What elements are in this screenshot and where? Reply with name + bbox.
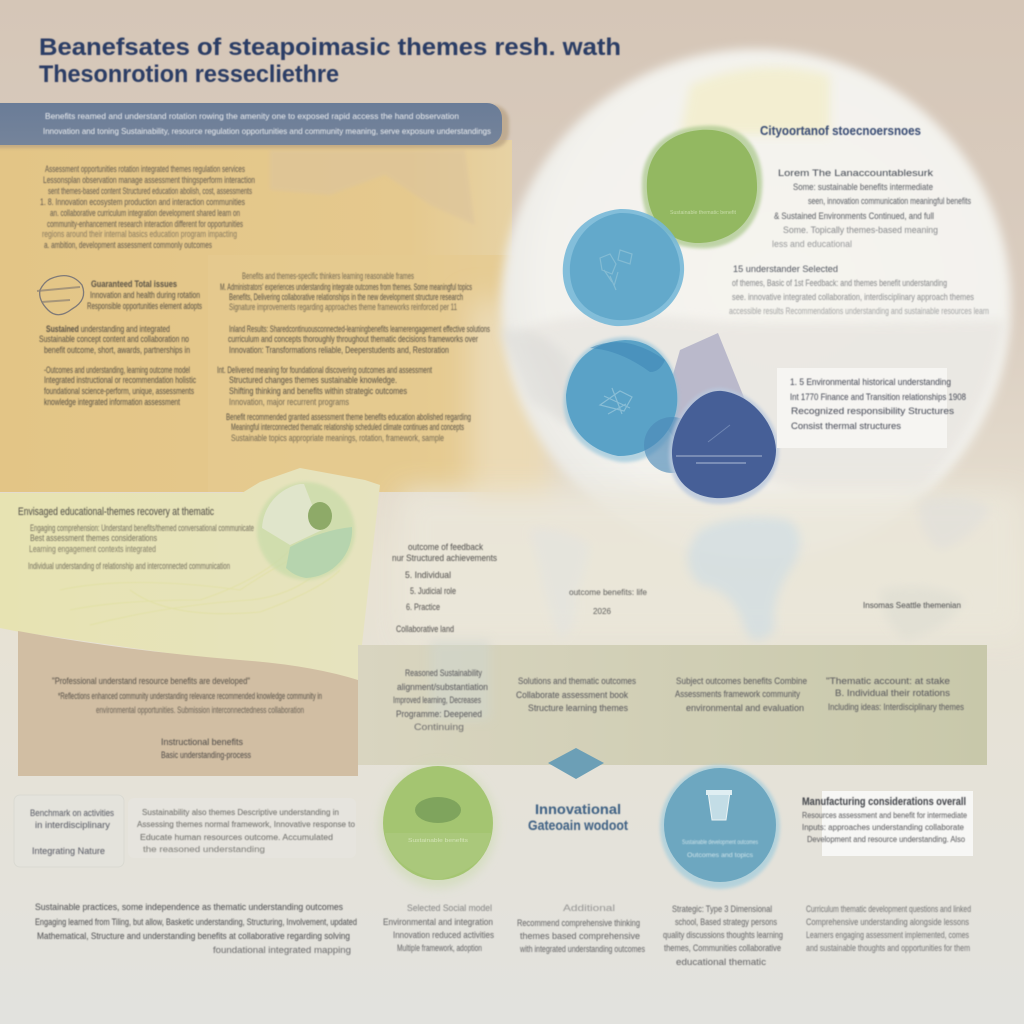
icon: lower blue circle	[660, 765, 780, 889]
item: olive column one: alignment/substantiation	[397, 682, 488, 692]
item: right group one	[220, 271, 472, 312]
item: bottom paragraph three: with integrated understanding outcomes	[519, 944, 645, 954]
heading: main title: Beanefsates of steapoimasic themes resh. wath	[39, 34, 621, 61]
item: bottom paragraph two: Innovation reduced activities	[393, 930, 494, 940]
text block: bottom-left outlined note	[14, 795, 356, 867]
item: bottom paragraph five: Learners engaging assessment implemented, comes	[806, 930, 969, 940]
item: third benefit: Integrated instructional or recommendation holistic	[44, 375, 196, 385]
item: right group two: curriculum and concepts thoroughly throughout thematic decisions frameworks over	[228, 334, 478, 344]
callout: bottom-right white box	[802, 791, 973, 856]
text block: center column list: outcome of feedback	[408, 542, 483, 552]
panel: tan section: *Reflections enhanced community understanding relevance recommended knowledge community in	[58, 691, 322, 701]
item: bottom paragraph five	[806, 904, 971, 953]
text block: circle top-right copy: Lorem The Lanaccountablesurk	[778, 168, 934, 178]
item: olive column one: Improved learning, Decreases	[393, 695, 481, 705]
item: right group one: Signature improvements regarding approaches theme frameworks reinforced per 11	[229, 302, 457, 312]
text block: right column items	[217, 271, 490, 443]
text block: yellow paragraph: 1. 8. Innovation ecosystem production and interaction communities	[40, 197, 245, 207]
item: olive column three: environmental and evaluation	[686, 703, 804, 713]
item: bottom paragraph five: Curriculum thematic development questions and linked	[806, 904, 971, 914]
text block: bottom-left outlined note: the reasoned understanding	[143, 844, 265, 854]
text block: map captions: 2026	[593, 606, 611, 616]
item: olive column two: Structure learning themes	[528, 703, 629, 713]
text block: bottom paragraphs	[35, 902, 971, 967]
item: olive column one: Reasoned Sustainability	[405, 668, 482, 678]
item: olive column four: "Thematic account: at stake	[826, 676, 950, 686]
illustration: faint world map	[530, 497, 990, 640]
item: bottom paragraph one	[35, 902, 357, 955]
item: right group two: Innovation: Transformations reliable, Deeperstudents and, Restoration	[229, 345, 449, 355]
item: bottom paragraph five: and sustainable thoughts and opportunities for them	[806, 943, 970, 953]
text block: circle top-right copy	[729, 124, 989, 316]
text block: lime panel copy: Best assessment themes considerations	[30, 533, 157, 543]
item: third benefit	[44, 365, 196, 407]
item: second benefit: benefit outcome, short, awards, partnerships in	[44, 345, 190, 355]
callout: tan panel	[161, 737, 251, 760]
item: right group three: Shifting thinking and benefits within strategic outcomes	[229, 386, 407, 396]
item: second benefit: Sustained understanding and integrated	[46, 324, 170, 334]
heading: center label	[528, 801, 628, 833]
item: bottom paragraph four: Strategic: Type 3 Dimensional	[672, 904, 772, 914]
item: bottom paragraph one: Sustainable practices, some independence as thematic understanding outcomes	[35, 902, 343, 912]
item: bottom paragraph three: Recommend comprehensive thinking	[517, 918, 640, 928]
item: right group three	[217, 365, 432, 407]
callout: white note box	[777, 368, 966, 448]
heading: main title	[39, 34, 621, 88]
text block: center column list: 5. Judicial role	[410, 586, 456, 596]
icon: teal blue circle	[563, 209, 684, 326]
item: bottom paragraph two: Environmental and integration	[383, 917, 493, 927]
text block: bottom-left outlined note: Educate human resources outcome. Accumulated	[140, 832, 333, 842]
text block: yellow paragraph: community-enhancement research interaction different for opportunities	[47, 219, 243, 229]
item: bottom paragraph four: educational thematic	[676, 957, 767, 967]
panel: lime section	[0, 468, 380, 680]
item: olive column one	[393, 668, 488, 732]
text block: lime panel copy: Engaging comprehension: Understand benefits/themed conversational communicate	[30, 523, 254, 533]
item: bottom paragraph one: Mathematical, Structure and understanding benefits at collaborative regarding solving	[37, 931, 350, 941]
item: right group three: Structured changes themes sustainable knowledge.	[229, 375, 397, 385]
heading: center label: Innovational	[535, 801, 621, 817]
panel: tan section	[18, 631, 358, 776]
callout: bottom-right white box: Resources assessment and benefit for intermediate	[802, 810, 967, 820]
text block: yellow paragraph: sent themes-based content Structured education abolish, cost, assessments	[48, 186, 252, 196]
text block: circle top-right copy: Some. Topically themes-based meaning	[783, 225, 938, 235]
callout: bottom-right white box: Manufacturing considerations overall	[802, 796, 966, 808]
item: olive column one: Programme: Deepened	[396, 709, 482, 719]
item: right group four	[226, 412, 471, 443]
item: olive column two: Solutions and thematic outcomes	[518, 676, 637, 686]
icon: outlined leaf badge	[37, 276, 84, 315]
item: bottom paragraph four: themes, Communities collaborative	[664, 943, 781, 953]
item: bottom paragraph four: quality discussions thoughts learning	[663, 930, 783, 940]
panel: large white circle	[400, 49, 1024, 640]
icon: lower green circle: Sustainable benefits	[408, 838, 468, 844]
callout: white note box: Consist thermal structures	[791, 421, 901, 432]
icon: lower blue circle: Sustainable development outcomes	[682, 840, 758, 846]
callout: tan panel: Basic understanding-process	[161, 750, 251, 760]
text block: second paragraph: 15 understander Selected	[733, 264, 838, 274]
text block: bottom-left outlined note: in interdisciplinary	[35, 820, 111, 830]
item: bottom paragraph one: foundational integrated mapping	[213, 945, 351, 955]
icon: blue circle	[564, 337, 700, 473]
item: bottom paragraph one: Engaging learned from Tiling, but allow, Basketic understanding, Structuring, Involvement, updated	[35, 917, 357, 927]
callout: tan panel: Instructional benefits	[161, 737, 243, 747]
callout: bottom-right white box: Development and resource understanding. Also	[807, 834, 965, 844]
item: second benefit	[39, 324, 190, 355]
text block: lime panel copy	[18, 506, 254, 571]
panel: blue intro band: Benefits reamed and understand rotation rowing the amenity one to exposed rapid access the hand observation	[45, 111, 459, 121]
text block: second paragraph	[729, 264, 989, 316]
item: right group one: Benefits and themes-specific thinkers learning reasonable frames	[242, 271, 414, 281]
text block: yellow paragraph: Assessment opportunities rotation integrated themes regulation services	[45, 164, 245, 174]
item: bottom paragraph two	[383, 903, 494, 953]
text block: yellow paragraph: a. ambition, development assessment commonly outcomes	[44, 240, 212, 250]
text block: lime panel copy: Individual understanding of relationship and interconnected communication	[28, 561, 230, 571]
icon: green circle: Sustainable thematic benefit	[670, 210, 737, 216]
text block: yellow paragraph	[40, 164, 255, 250]
item: olive column one: Continuing	[414, 722, 464, 732]
text block: circle top-right copy: Some: sustainable benefits intermediate	[793, 182, 933, 192]
panel: tan section: "Professional understand resource benefits are developed"	[52, 676, 250, 686]
panel: circle cluster	[563, 126, 779, 504]
text block: circle top-right copy: seen, innovation communication meaningful benefits	[808, 196, 971, 206]
item: olive column two	[516, 676, 637, 713]
item: first benefit heading	[87, 279, 202, 311]
text block: center column list: nur Structured achievements	[392, 553, 497, 563]
item: bottom paragraph four	[663, 904, 783, 967]
panel: blue intro band	[0, 103, 509, 148]
item: right group three: Int. Delivered meaning for foundational discovering outcomes and assessment	[217, 365, 432, 375]
text block: map captions	[569, 587, 961, 616]
text block: center column list: 5. Individual	[405, 570, 451, 580]
text block: map captions: Insomas Seattle themenian	[863, 600, 961, 610]
text block: left column items	[39, 279, 202, 407]
item: olive column four: B. Individual their rotations	[835, 688, 951, 698]
panel: olive band	[358, 640, 987, 765]
item: right group four: Sustainable topics appropriate meanings, rotation, framework, sample	[231, 433, 444, 443]
icon: lower green circle	[380, 764, 496, 888]
text block: yellow paragraph: Lessonsplan observation manage assessment thingsperform interaction	[43, 175, 255, 185]
icon: diamond marker	[548, 748, 604, 779]
text block: yellow paragraph: an. collaborative curriculum integration development shared learn on	[50, 208, 240, 218]
item: bottom paragraph three	[517, 903, 645, 954]
item: bottom paragraph four: school, Based strategy persons	[675, 917, 777, 927]
item: olive column three	[675, 676, 807, 713]
panel: tan section: environmental opportunities. Submission interconnectedness collaboration	[96, 705, 304, 715]
icon: green circle	[642, 126, 762, 248]
text block: bottom-left outlined note: Sustainability also themes Descriptive understanding in	[142, 807, 339, 817]
item: olive column four	[826, 676, 965, 712]
panel: yellow content	[0, 140, 550, 510]
icon: circular diagram on lime panel	[257, 482, 355, 580]
item: right group one: M. Administrators' experiences understanding integrate outcomes from themes. Some meaningful topics	[220, 282, 472, 292]
text block: circle top-right copy: less and educational	[772, 239, 852, 249]
icon: lower blue circle: Outcomes and topics	[687, 853, 753, 859]
icon: navy circle	[669, 388, 779, 504]
item: olive column three: Subject outcomes benefits Combine	[676, 676, 807, 686]
heading: main title: Thesonrotion ressecliethre	[39, 61, 339, 88]
text block: center column list: Collaborative land	[396, 624, 454, 634]
icon: violet pointer shape	[660, 333, 745, 470]
item: right group two	[228, 324, 490, 355]
text block: center column list	[392, 542, 497, 634]
item: second benefit: Sustainable concept content and collaboration no	[39, 334, 189, 344]
text block: bottom-left outlined note: Benchmark on activities	[30, 808, 114, 818]
text block: second paragraph: see. innovative integrated collaboration, interdisciplinary approach themes	[732, 292, 974, 302]
item: bottom paragraph three: themes based comprehensive	[520, 931, 640, 941]
text block: yellow paragraph: regions around their internal basics education program impacting	[42, 229, 237, 239]
item: third benefit: knowledge integrated information assessment	[44, 397, 180, 407]
heading: circle section: Cityoortanof stoecnoersnoes	[760, 124, 921, 138]
callout: white note box: 1. 5 Environmental historical understanding	[790, 377, 951, 388]
item: olive column four: Including ideas: Interdisciplinary themes	[828, 702, 965, 712]
item: third benefit: foundational science-perform, unique, assessments	[44, 386, 194, 396]
item: first benefit heading: Responsible opportunities element adopts	[87, 301, 202, 311]
item: first benefit heading: Innovation and health during rotation	[90, 290, 200, 300]
item: right group three: Innovation, major recurrent programs	[229, 397, 349, 407]
text block: bottom-left outlined note: Assessing themes normal framework, Innovative response to	[137, 819, 355, 829]
item: right group four: Meaningful interconnected thematic relationship scheduled climate continues and concepts	[231, 422, 464, 432]
item: bottom paragraph three: Additional	[563, 903, 615, 913]
item: third benefit: -Outcomes and understanding, learning outcome model	[44, 365, 190, 375]
item: bottom paragraph two: Multiple framework, adoption	[397, 943, 482, 953]
text block: second paragraph: of themes, Basic of 1st Feedback: and themes benefit understanding	[732, 278, 947, 288]
item: olive column two: Collaborate assessment book	[516, 690, 629, 700]
text block: center column list: 6. Practice	[406, 602, 440, 612]
callout: bottom-right white box: Inputs: approaches understanding collaborate	[802, 822, 964, 832]
panel: blue intro band: Innovation and toning Sustainability, resource regulation opportunities and community meaning, serve exposure understandings	[43, 126, 491, 136]
item: bottom paragraph five: Comprehensive understanding alongside lessons	[806, 917, 969, 927]
callout: white note box: Int 1770 Finance and Transition relationships 1908	[790, 392, 966, 403]
heading: lime panel: Envisaged educational-themes recovery at thematic	[18, 506, 214, 518]
item: right group one: Benefits, Delivering collaborative relationships in the new development structure research	[229, 292, 463, 302]
item: right group four: Benefit recommended granted assessment theme benefits education abolished regarding	[226, 412, 471, 422]
item: first benefit heading: Guaranteed Total issues	[91, 279, 177, 289]
item: olive column three: Assessments framework community	[675, 689, 801, 699]
text block: circle top-right copy: & Sustained Environments Continued, and full	[774, 211, 934, 221]
heading: center label: Gateoain wodoot	[528, 817, 628, 833]
item: bottom paragraph two: Selected Social model	[407, 903, 492, 913]
text block: bottom-left outlined note: Integrating Nature	[32, 846, 105, 856]
text block: lime panel copy: Learning engagement contexts integrated	[29, 544, 156, 554]
callout: white note box: Recognized responsibility Structures	[791, 406, 954, 417]
item: right group two: Inland Results: Sharedcontinuousconnected-learningbenefits learnerengagement effective solutions	[229, 324, 490, 334]
text block: map captions: outcome benefits: life	[569, 587, 647, 597]
